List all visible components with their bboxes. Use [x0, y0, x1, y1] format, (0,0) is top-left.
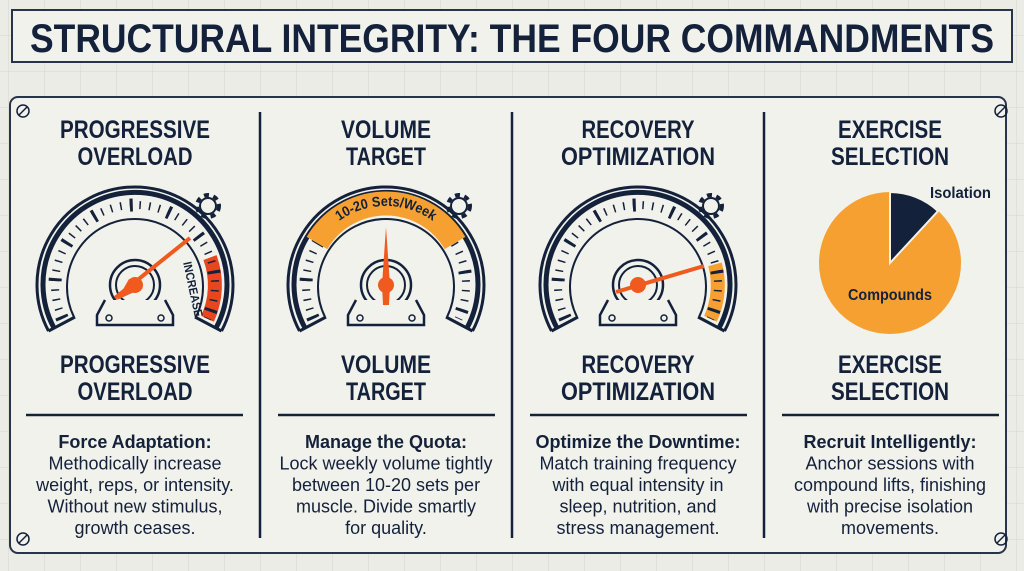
text block: sleep, nutrition, and — [559, 496, 717, 516]
text block: with equal intensity in — [551, 475, 724, 495]
gauge: increase: INCREASE — [180, 260, 206, 318]
heading: TARGET — [346, 143, 426, 171]
text block: between 10-20 sets per — [292, 475, 480, 495]
heading: VOLUME — [341, 116, 431, 144]
panel: volume target — [278, 116, 495, 538]
text block: weight, reps, or intensity. — [35, 475, 234, 495]
text block: Match training frequency — [539, 454, 737, 474]
text block: Methodically increase — [48, 454, 222, 474]
heading: RECOVERY — [582, 116, 695, 144]
subheading: OPTIMIZATION — [561, 378, 715, 406]
gauge: volume: 10-20 Sets/Week — [335, 196, 437, 221]
gauge: increase — [37, 187, 233, 331]
subheading: VOLUME — [341, 351, 431, 379]
heading: EXERCISE — [838, 116, 942, 144]
heading: OVERLOAD — [78, 143, 192, 171]
heading: SELECTION — [831, 143, 949, 171]
subheading: SELECTION — [831, 378, 949, 406]
main panel — [10, 97, 1007, 553]
subheading: OVERLOAD — [78, 378, 192, 406]
text block: Without new stimulus, — [47, 496, 223, 516]
text block: Lock weekly volume tightly — [279, 454, 493, 474]
text block: compound lifts, finishing — [794, 475, 986, 495]
text block: movements. — [841, 518, 939, 538]
subheading: PROGRESSIVE — [60, 351, 210, 379]
panel: progressive overload — [26, 116, 243, 538]
subheading: TARGET — [346, 378, 426, 406]
text block: Force Adaptation: — [58, 432, 212, 452]
pie chart: Isolation — [930, 185, 991, 202]
text block: for quality. — [345, 518, 427, 538]
pie chart: Compounds — [848, 287, 932, 304]
pie chart — [819, 185, 991, 334]
icon: gear — [448, 195, 470, 217]
text block: Manage the Quota: — [305, 432, 467, 452]
text block: Optimize the Downtime: — [535, 432, 741, 452]
text block: muscle. Divide smartly — [296, 496, 476, 516]
heading: PROGRESSIVE — [60, 116, 210, 144]
text block: growth ceases. — [74, 518, 196, 538]
text block: with precise isolation — [806, 496, 973, 516]
heading: OPTIMIZATION — [561, 143, 715, 171]
panel: recovery optimization — [530, 116, 747, 538]
icon: gear — [197, 195, 219, 217]
subheading: EXERCISE — [838, 351, 942, 379]
text block: stress management. — [556, 518, 720, 538]
gauge: volume — [286, 186, 486, 332]
panel: exercise selection — [782, 116, 999, 538]
icon: gear — [700, 195, 722, 217]
subheading: RECOVERY — [582, 351, 695, 379]
text block: Recruit Intelligently: — [803, 432, 977, 452]
text block: Anchor sessions with — [805, 454, 975, 474]
gauge: recovery — [540, 187, 736, 331]
